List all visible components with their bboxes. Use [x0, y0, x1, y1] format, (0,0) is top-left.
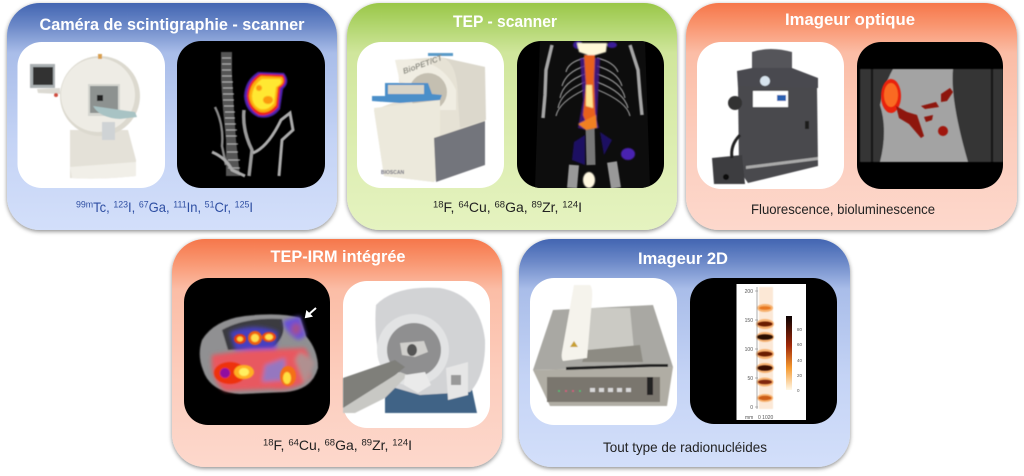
caption: modalities: Tout type de radionucléides	[603, 439, 767, 455]
image: BioPET/CT scanner: BioPET/CT	[402, 53, 445, 76]
caption: radionuclides: 51	[205, 200, 214, 210]
caption: radionuclides: I	[249, 199, 253, 215]
caption: radionuclides: 67	[139, 200, 149, 210]
image: scintigraphy scan	[177, 41, 325, 188]
heading: Imageur 2D: Imageur 2D	[638, 249, 728, 268]
chart: activity profile: 200	[745, 289, 753, 295]
image: scintigraphy camera	[18, 42, 165, 188]
chart: activity profile: 150	[745, 318, 753, 324]
caption: radionuclides: Cu,	[469, 199, 495, 215]
image: PET-CT skeleton scan	[517, 41, 664, 188]
image: BioPET/CT scanner: BIOSCAN	[381, 170, 404, 176]
chart: activity profile: 80	[797, 327, 803, 332]
caption: radionuclides: I	[578, 199, 582, 215]
panel: Imageur 2D	[519, 239, 850, 467]
image: PET-MRI scan	[184, 278, 330, 425]
caption: radionuclides: I	[408, 437, 412, 453]
chart: activity profile: 0	[750, 405, 753, 411]
caption: radionuclides: Ga,	[505, 199, 532, 215]
caption: radionuclides: Cr,	[214, 199, 235, 215]
caption: radionuclides: 124	[562, 200, 578, 210]
image: PET-MRI scanner	[343, 281, 490, 428]
caption: radionuclides: F,	[274, 437, 288, 453]
image: 2D autoradiography	[690, 278, 837, 424]
caption: radionuclides: 89	[532, 200, 542, 210]
panel: Caméra de scintigraphie - scanner	[7, 3, 337, 230]
chart: activity profile: mm	[745, 415, 753, 421]
icon: white arrow	[306, 308, 316, 317]
caption: radionuclides: In,	[187, 199, 205, 215]
chart: activity profile: 100	[745, 347, 753, 353]
image: BioPET/CT scanner	[357, 42, 504, 188]
chart: activity profile	[736, 284, 806, 421]
heading: TEP-IRM intégrée: TEP-IRM intégrée	[270, 247, 406, 266]
image: fluorescence scan	[857, 42, 1003, 189]
caption: radionuclides: 123	[113, 200, 128, 210]
heading: TEP - scanner: TEP - scanner	[453, 12, 557, 31]
heading: Imageur optique: Imageur optique	[785, 10, 915, 29]
panel: TEP - scanner	[347, 3, 677, 230]
caption: modalities: Fluorescence, bioluminescence	[751, 201, 935, 217]
caption: radionuclides: 125	[235, 200, 249, 210]
caption: radionuclides: 124	[392, 438, 408, 448]
chart: activity profile: 0	[797, 388, 800, 393]
panel: Imageur optique	[686, 3, 1017, 230]
caption: radionuclides: 18	[433, 200, 444, 210]
caption: radionuclides: Ga,	[149, 199, 173, 215]
chart: activity profile: 60	[797, 342, 803, 347]
caption: radionuclides: Zr,	[372, 437, 392, 453]
caption: radionuclides: 68	[325, 438, 335, 448]
chart: activity profile: 0 1020	[758, 415, 774, 421]
image: optical imager	[697, 42, 844, 189]
caption: radionuclides: Zr,	[542, 199, 562, 215]
caption: radionuclides: Ga,	[335, 437, 362, 453]
caption: radionuclides: I,	[128, 199, 139, 215]
panel: TEP-IRM intégrée	[172, 239, 502, 467]
caption: radionuclides: 64	[288, 438, 299, 448]
caption: radionuclides: 68	[495, 200, 505, 210]
chart: activity profile: 40	[797, 358, 803, 363]
chart: activity profile: 50	[747, 376, 753, 382]
caption: radionuclides: Cu,	[299, 437, 325, 453]
image: 2D imager device	[530, 278, 677, 425]
caption: radionuclides: 64	[458, 200, 469, 210]
chart: activity profile: 20	[797, 373, 803, 378]
heading: Caméra de scintigraphie - scanner: Caméra de scintigraphie - scanner	[40, 15, 305, 34]
caption: radionuclides: 18	[263, 438, 274, 448]
caption: radionuclides: 99m	[76, 200, 93, 210]
caption: radionuclides: Tc,	[93, 199, 113, 215]
caption: radionuclides: 89	[362, 438, 372, 448]
caption: radionuclides: F,	[444, 199, 458, 215]
caption: radionuclides: 111	[173, 200, 187, 210]
